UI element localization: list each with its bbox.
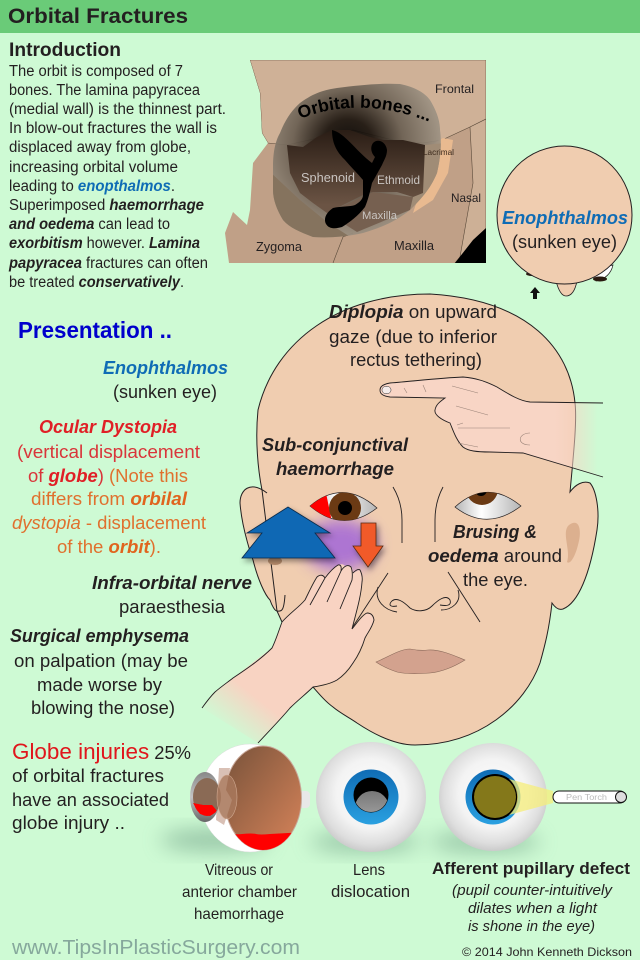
bruise on right ear [566, 523, 580, 563]
eyeball: afferent pupillary defect [439, 743, 553, 851]
nose [556, 281, 577, 296]
presentation: globe injuries: globe injury .. [12, 813, 125, 833]
presentation: enophthalmos: (sunken eye) [113, 382, 217, 402]
blue upward arrow [242, 507, 335, 558]
presentation: ocular dystopia [12, 417, 206, 557]
footer: website: www.TipsInPlasticSurgery.com [11, 937, 300, 959]
presentation: surgical emphysema [10, 626, 189, 718]
caption: lens dislocation: dislocation [331, 882, 410, 901]
presentation: globe injuries: of orbital fractures [12, 766, 164, 786]
presentation: globe injuries [12, 739, 191, 833]
presentation: ocular dystopia: Ocular Dystopia [39, 417, 177, 437]
title banner: Orbital Fractures [8, 5, 188, 28]
label: bruising and oedema: oedema around [428, 546, 562, 566]
presentation: infra-orbital nerve: Infra-orbital nerve [92, 573, 252, 593]
panel: orbital bones diagram: Sphenoid [301, 170, 355, 185]
caption: afferent pupillary defect: Afferent pupillary defect [432, 859, 630, 878]
label: Enophthalmos [502, 208, 628, 228]
label: diplopia: gaze (due to inferior [329, 327, 497, 347]
presentation: surgical emphysema: made worse by [37, 675, 162, 695]
label: diplopia [329, 302, 497, 370]
orange downward arrow [353, 523, 383, 567]
panel: orbital bones diagram [225, 60, 486, 263]
panel: introduction text: displaced away from globe, [9, 139, 191, 156]
heading: presentation: Presentation .. [18, 317, 172, 343]
panel: head from above [497, 146, 632, 299]
caption: afferent pupillary defect: dilates when a light [468, 900, 598, 917]
eyeball: vitreous haemorrhage cross-section [190, 744, 310, 855]
label: Orbital bones: Orbital bones ... [298, 95, 429, 122]
panel: introduction text: be treated conservatively. [9, 274, 184, 291]
label: sub-conjunctival haemorrhage [262, 435, 409, 479]
panel: introduction text: Superimposed haemorrhage [9, 197, 204, 214]
presentation: ocular dystopia: of the orbit). [57, 537, 161, 557]
label: diplopia: rectus tethering) [350, 350, 482, 370]
presentation: surgical emphysema: blowing the nose) [31, 698, 175, 718]
panel: introduction text: increasing orbital volume [9, 159, 178, 176]
caption: afferent pupillary defect: is shone in the eye) [468, 918, 595, 935]
caption: afferent pupillary defect [432, 859, 630, 935]
nose and nasal creases [352, 487, 480, 628]
panel: orbital bones diagram: Frontal [435, 82, 474, 96]
presentation: infra-orbital nerve [92, 573, 252, 617]
lips [376, 649, 465, 674]
caption: vitreous haemorrhage: anterior chamber [182, 884, 298, 901]
upper hand [380, 377, 603, 477]
presentation: enophthalmos [103, 358, 228, 402]
caption: lens dislocation: Lens [353, 862, 385, 879]
eye bumps [518, 263, 613, 282]
bruise glow around eye [304, 519, 376, 571]
panel: orbital bones diagram: Maxilla [362, 210, 398, 222]
label: sub-conjunctival haemorrhage: haemorrhage [276, 459, 394, 479]
eyeball: lens dislocation [316, 742, 426, 852]
pen torch [553, 791, 626, 803]
panel: introduction text: leading to enopthalmos. [9, 178, 175, 195]
bruise mark on left cheek [268, 557, 282, 565]
label: bruising and oedema [428, 522, 562, 590]
title banner [0, 0, 640, 33]
caption: vitreous haemorrhage: Vitreous or [205, 862, 274, 879]
panel: introduction text: and oedema can lead to [9, 216, 170, 233]
presentation: surgical emphysema: on palpation (may be [14, 651, 188, 671]
panel: introduction text: bones. The lamina papyracea [9, 82, 200, 99]
panel: introduction text [8, 40, 226, 291]
panel: orbital bones diagram: Maxilla [394, 239, 434, 253]
ground shadows beneath eyeballs [160, 829, 540, 852]
presentation: ocular dystopia: (vertical displacement [17, 442, 200, 462]
label: sub-conjunctival haemorrhage: Sub-conjunctival [262, 435, 409, 455]
presentation: ocular dystopia: of globe) (Note this [28, 466, 188, 486]
head circle [497, 146, 632, 284]
label: bruising and oedema: Brusing & [453, 522, 537, 542]
panel: introduction text: The orbit is composed of 7 [9, 63, 183, 80]
panel: face illustration [202, 294, 603, 745]
lower hand [202, 564, 374, 743]
presentation: enophthalmos: Enophthalmos [103, 358, 228, 378]
panel: introduction text: Introduction [9, 40, 121, 61]
footer: copyright: © 2014 John Kenneth Dickson [462, 945, 632, 959]
presentation: globe injuries: Globe injuries 25% [12, 739, 191, 764]
right eye [454, 492, 522, 520]
caption: vitreous haemorrhage [182, 862, 298, 923]
presentation: ocular dystopia: dystopia - displacement [12, 513, 206, 533]
label: diplopia: Diplopia on upward [329, 302, 497, 322]
pen torch: Pen Torch [566, 792, 607, 802]
presentation: globe injuries: have an associated [12, 790, 169, 810]
label: bruising and oedema: the eye. [463, 570, 528, 590]
panel: orbital bones diagram: Ethmoid [377, 173, 420, 187]
face outline [240, 294, 598, 745]
panel: orbital bones diagram: Lacrimal [423, 147, 454, 157]
panel: introduction text: exorbitism however. Lamina [9, 235, 200, 252]
caption: lens dislocation [331, 862, 410, 901]
panel: introduction text: papyracea fractures can often [8, 255, 208, 272]
presentation: ocular dystopia: differs from orbilal [31, 489, 188, 509]
panel: orbital bones diagram: Nasal [451, 191, 481, 205]
arrow [530, 287, 540, 299]
presentation: infra-orbital nerve: paraesthesia [119, 597, 226, 617]
left eye [310, 492, 378, 521]
panel: head from above: (sunken eye) [512, 232, 617, 252]
panel: orbital bones diagram: Zygoma [256, 240, 302, 254]
presentation: surgical emphysema: Surgical emphysema [10, 626, 189, 646]
caption: afferent pupillary defect: (pupil counter-intuitively [452, 882, 614, 899]
panel: introduction text: (medial wall) is the thinnest part. [9, 101, 226, 118]
caption: vitreous haemorrhage: haemorrhage [194, 906, 284, 923]
panel: introduction text: In blow-out fractures the wall is [9, 120, 217, 137]
